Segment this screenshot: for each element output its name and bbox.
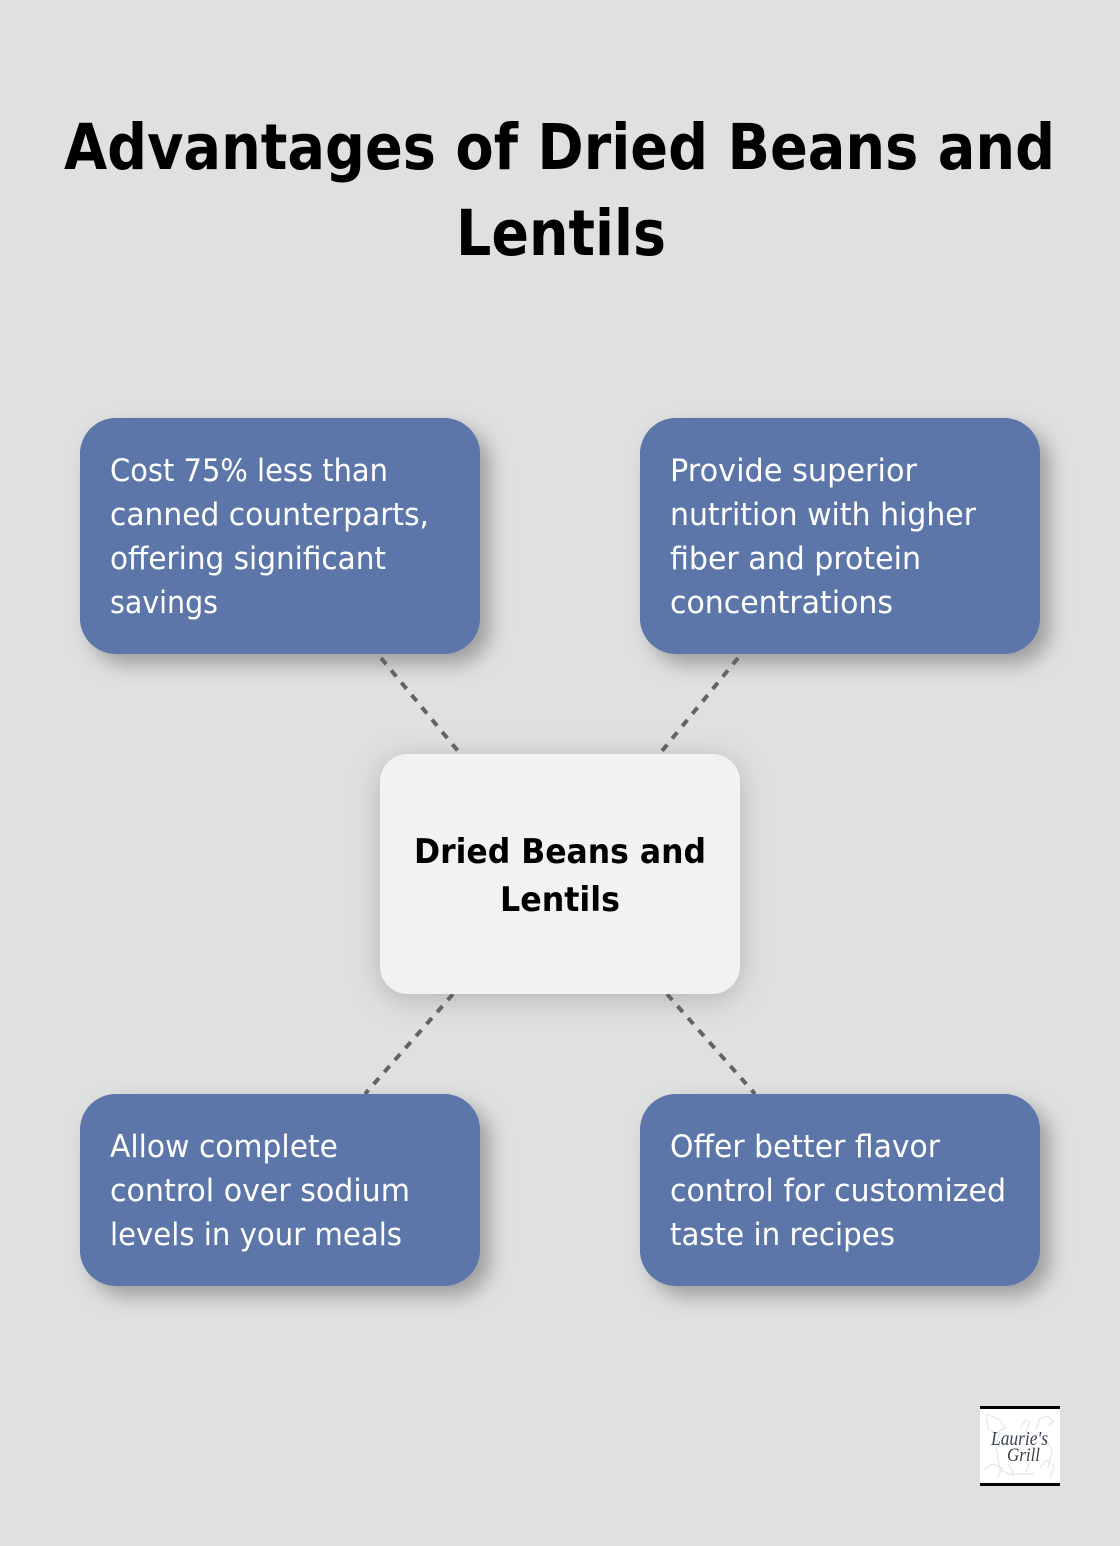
connector: bottom-right — [667, 994, 755, 1094]
panel: cost: savings — [110, 585, 218, 621]
panel: flavor: Offer better flavor — [670, 1129, 940, 1165]
panel: cost: canned counterparts, — [110, 497, 429, 533]
panel: sodium: levels in your meals — [110, 1217, 402, 1253]
title: Lentils — [456, 197, 666, 270]
connector: top-right — [662, 658, 738, 751]
logo: Laurie's Grill — [980, 1406, 1060, 1486]
panel: flavor — [640, 1094, 1040, 1286]
logo: Laurie's Grill: Grill — [1007, 1446, 1040, 1466]
title — [64, 111, 1055, 270]
connector: bottom-left — [365, 994, 453, 1094]
panel: nutrition: fiber and protein — [670, 541, 921, 577]
panel: flavor: taste in recipes — [670, 1217, 895, 1253]
panel: cost — [80, 418, 480, 654]
panel: cost: Cost 75% less than — [110, 453, 388, 489]
panel: sodium — [80, 1094, 480, 1286]
panel: nutrition: concentrations — [670, 585, 893, 621]
panel: sodium: Allow complete — [110, 1129, 338, 1165]
panel: cost: offering significant — [110, 541, 386, 577]
panel: flavor: control for customized — [670, 1173, 1006, 1209]
panel: nutrition: Provide superior — [670, 453, 917, 489]
panel: center topic: Lentils — [500, 880, 620, 920]
panel: center topic: Dried Beans and — [414, 832, 706, 872]
shadows of panels — [80, 418, 1040, 1286]
panel: center topic — [380, 754, 740, 994]
panel: nutrition: nutrition with higher — [670, 497, 976, 533]
connector: top-left — [381, 658, 458, 751]
panel: nutrition — [640, 418, 1040, 654]
panel: sodium: control over sodium — [110, 1173, 410, 1209]
logo: Laurie's Grill: Laurie's — [990, 1428, 1048, 1450]
